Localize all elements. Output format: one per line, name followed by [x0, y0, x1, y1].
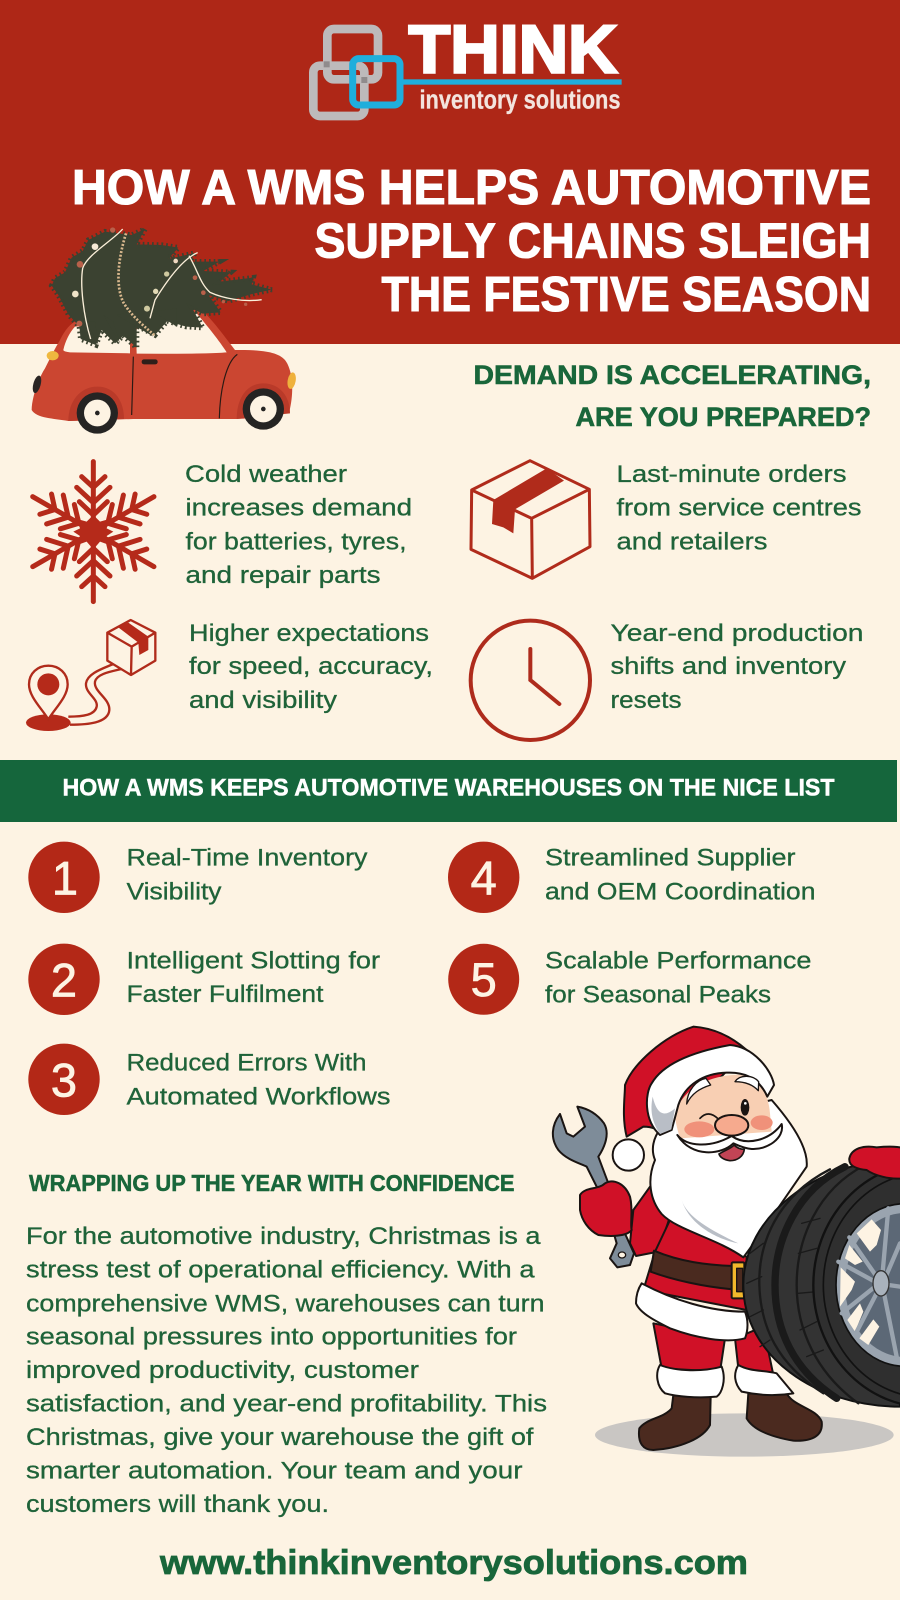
icon: red car with Christmas tree on the roof	[31, 227, 297, 434]
trouser cuffs	[657, 1365, 793, 1397]
text: last-minute orders: from service centres	[616, 494, 862, 522]
face	[675, 1075, 772, 1138]
cheeks	[684, 1121, 714, 1137]
eyebrows	[687, 1076, 759, 1104]
list item 5	[448, 944, 812, 1015]
hat band	[647, 1045, 774, 1135]
list item 1: Real-Time Inventory	[126, 845, 368, 872]
alloy wheel	[836, 1204, 900, 1366]
text: year-end production	[610, 620, 864, 714]
text: cold weather: and repair parts	[186, 562, 380, 589]
list item 5: Scalable Performance	[545, 948, 812, 975]
text: year-end production: Year-end production	[610, 620, 864, 647]
tree	[52, 229, 272, 348]
text: cold weather	[185, 461, 412, 589]
closing paragraph: comprehensive WMS, warehouses can turn	[26, 1290, 544, 1318]
closing paragraph: seasonal pressures into opportunities for	[26, 1324, 517, 1350]
text: higher expectations: Higher expectations	[189, 620, 429, 647]
closing paragraph	[26, 1223, 547, 1518]
list item 5: 5	[471, 953, 497, 1006]
closing paragraph: customers will thank you.	[26, 1491, 329, 1518]
title: SUPPLY CHAINS SLEIGH	[314, 214, 871, 268]
text: last-minute orders: Last-minute orders	[616, 461, 846, 488]
jacket	[630, 1187, 747, 1310]
text: higher expectations	[189, 620, 433, 714]
boots	[639, 1393, 822, 1450]
list item 4: and OEM Coordination	[545, 878, 816, 905]
closing paragraph: For the automotive industry, Christmas is a	[26, 1223, 541, 1250]
text: year-end production: shifts and inventory	[610, 653, 846, 680]
pom-pom	[613, 1139, 644, 1171]
gloved hand	[580, 1181, 632, 1236]
title	[72, 161, 871, 322]
icon: parcel box	[471, 461, 590, 578]
text: year-end production: resets	[610, 687, 682, 714]
wheels	[68, 383, 290, 434]
subheading: demand is accelerating: ARE YOU PREPARED?	[576, 402, 871, 432]
belt and buckle	[651, 1251, 744, 1298]
list item 4: Streamlined Supplier	[545, 845, 796, 872]
wheel openings	[840, 1219, 881, 1345]
illustration: Santa holding a wrench and a tyre	[553, 1027, 900, 1457]
closing paragraph: improved productivity, customer	[26, 1357, 419, 1384]
moustache	[677, 1124, 782, 1152]
mouth	[719, 1145, 744, 1161]
website URL: www.thinkinventorysolutions.com	[159, 1544, 748, 1582]
text: higher expectations: for speed, accuracy,	[189, 653, 433, 680]
list item 1: Visibility	[126, 878, 222, 905]
ground shadow	[595, 1413, 894, 1457]
text: cold weather: for batteries, tyres,	[186, 528, 406, 556]
icon: clock	[471, 621, 590, 740]
subheading: demand is accelerating: DEMAND IS ACCELERATING,	[474, 360, 871, 390]
list item 2: Intelligent Slotting for	[126, 948, 380, 975]
closing paragraph: Christmas, give your warehouse the gift of	[26, 1424, 534, 1451]
hand on tyre	[849, 1147, 900, 1179]
logo: Think Inventory Solutions: inventory solutions	[420, 86, 620, 114]
header band	[0, 0, 900, 344]
list item 4	[448, 842, 816, 913]
section banner: nice list: HOW A WMS KEEPS AUTOMOTIVE WAREHOUSES ON THE NICE LIST	[62, 774, 835, 802]
text: higher expectations: and visibility	[189, 687, 337, 714]
wrench	[553, 1107, 634, 1267]
list item 1	[28, 842, 368, 913]
trousers	[653, 1323, 773, 1375]
string lights	[72, 227, 262, 339]
icon: delivery route with map pin and parcel	[26, 620, 155, 731]
subheading: demand is accelerating	[474, 360, 871, 432]
closing paragraph: stress test of operational efficiency. With a	[26, 1256, 535, 1284]
list item 3: 3	[51, 1054, 77, 1106]
list item 2	[28, 944, 380, 1015]
tyre	[743, 1160, 900, 1407]
list item 3	[28, 1044, 391, 1115]
list item 5: for Seasonal Peaks	[545, 982, 771, 1009]
list item 3: Reduced Errors With	[126, 1050, 366, 1077]
list item 3: Automated Workflows	[126, 1083, 390, 1110]
text: cold weather: Cold weather	[185, 461, 347, 488]
nose	[715, 1115, 748, 1136]
car body	[32, 305, 292, 421]
text: cold weather: increases demand	[186, 494, 412, 522]
title: HOW A WMS HELPS AUTOMOTIVE	[72, 161, 871, 215]
list item 1: 1	[52, 851, 78, 904]
wink and eye	[700, 1114, 718, 1119]
coat hem	[636, 1283, 747, 1340]
head detail	[647, 1045, 782, 1161]
section banner: nice list	[0, 760, 897, 822]
text: last-minute orders: and retailers	[616, 528, 768, 556]
text: last-minute orders	[616, 461, 862, 556]
beard	[650, 1100, 807, 1257]
list item 2: 2	[51, 954, 77, 1006]
closing paragraph: satisfaction, and year-end profitability. This	[26, 1390, 547, 1418]
hat	[624, 1027, 747, 1137]
list item 2: Faster Fulfilment	[126, 981, 324, 1008]
list item 4: 4	[471, 851, 497, 904]
logo: Think Inventory Solutions: THINK	[408, 12, 618, 88]
closing paragraph: smarter automation. Your team and your	[26, 1458, 522, 1484]
heading: wrapping up the year: WRAPPING UP THE YEAR WITH CONFIDENCE	[29, 1170, 514, 1196]
icon: snowflake	[24, 462, 162, 602]
logo: Think Inventory Solutions	[313, 12, 622, 116]
